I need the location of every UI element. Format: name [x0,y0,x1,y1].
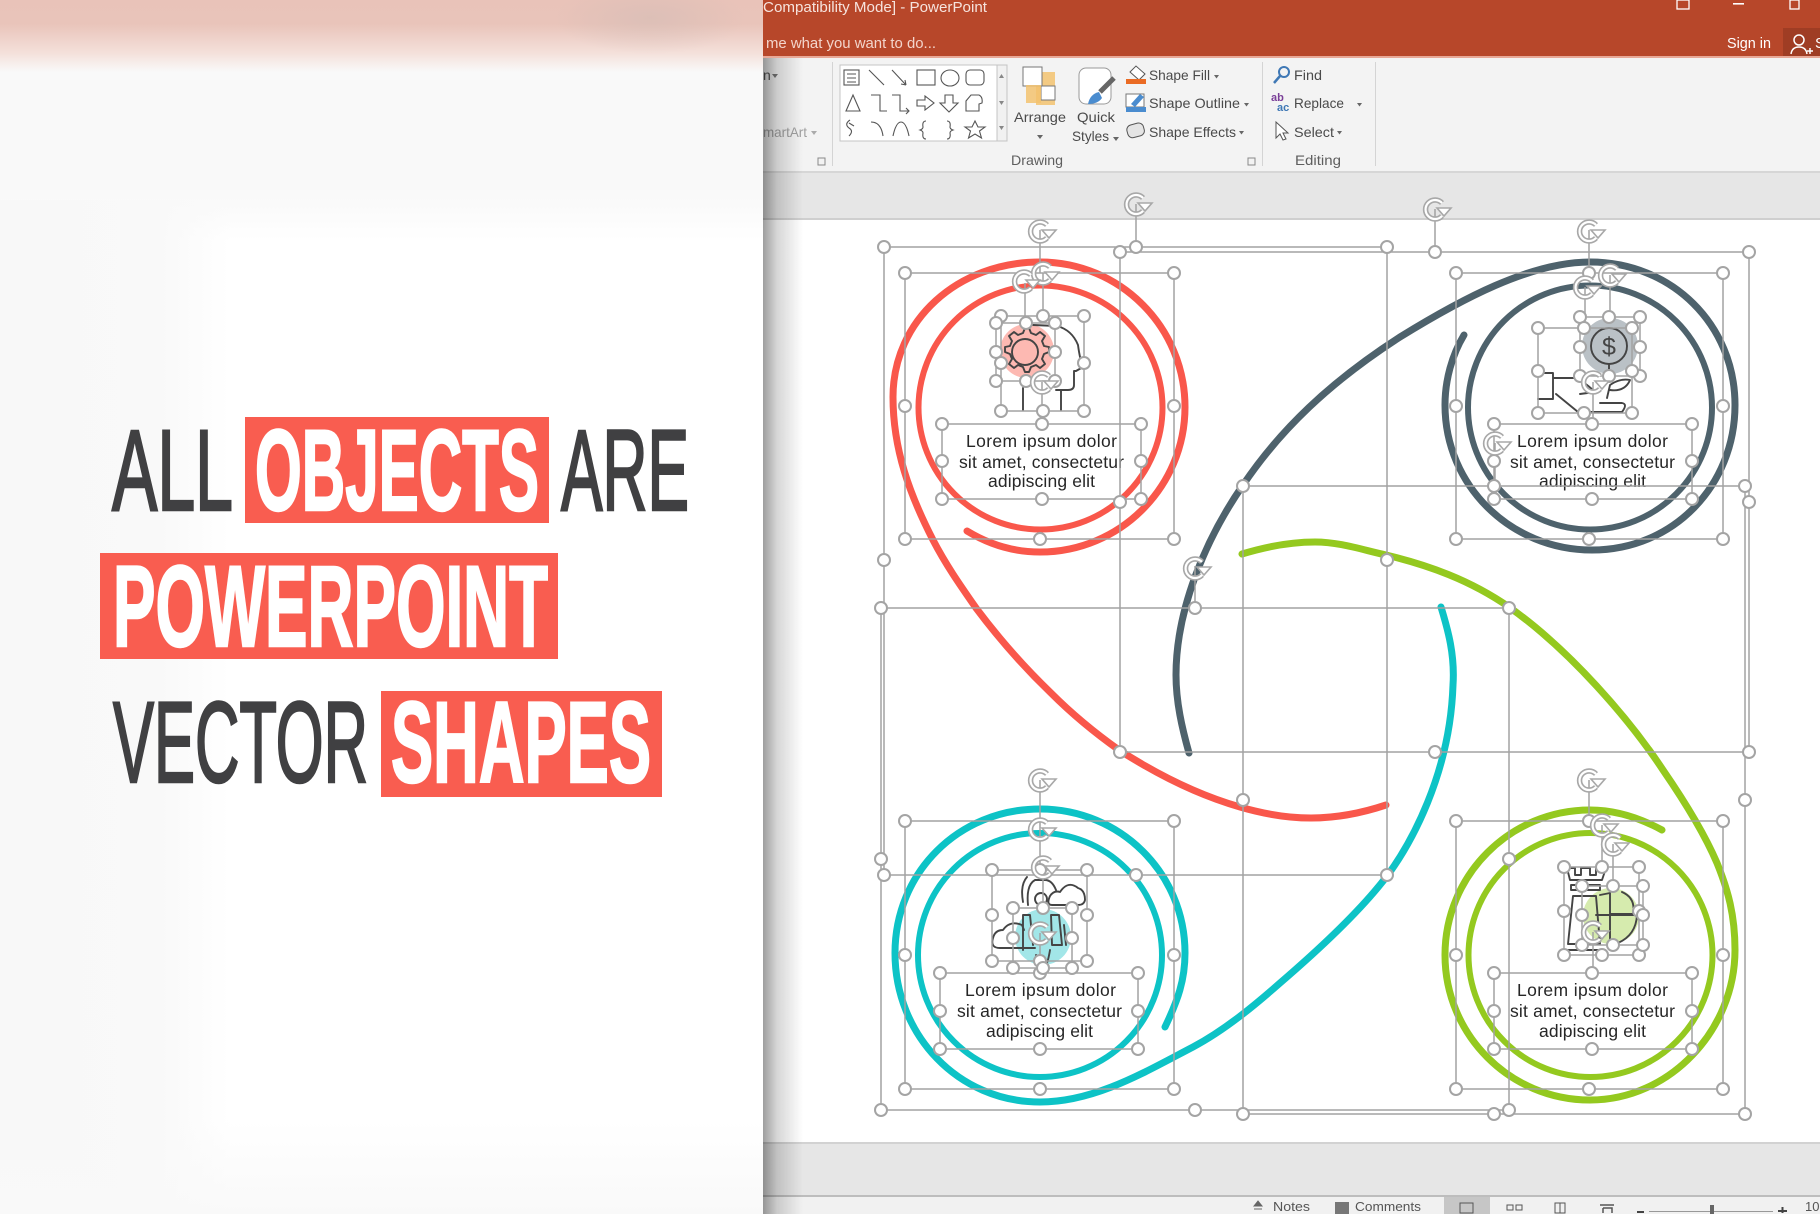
find, replace, select: ac [1277,102,1289,114]
shape gallery [840,65,1007,141]
text: teal item: sit amet, consectetur [957,1001,1122,1021]
title line 3: VECTOR [113,679,368,807]
text: red item: Lorem ipsum dolor [966,431,1117,451]
icon: head with gear [1000,324,1083,410]
title line 2: POWERPOINT [113,543,548,671]
title line 3: SHAPES [391,679,651,807]
shape fill, outline, effects: Shape Outline [1149,95,1240,111]
title line 1: ARE [561,407,689,535]
panel: powerpoint window title bar: Sign in [1727,35,1771,52]
panel: ribbon: martArt [763,124,807,140]
panel: powerpoint window title bar [763,0,1820,58]
text: green item: sit amet, consectetur [1510,1001,1675,1021]
spiral: teal [895,607,1453,1102]
quick styles button: Styles [1072,128,1109,144]
text: slate item: Lorem ipsum dolor [1517,431,1668,451]
spiral: red [893,262,1386,818]
panel: status bar: Comments [1355,1199,1422,1214]
spiral: slate [1176,262,1735,753]
text: teal item: adipiscing elit [986,1021,1093,1041]
text: green item: adipiscing elit [1539,1021,1646,1041]
text: red item: adipiscing elit [988,471,1095,491]
arrange button: Arrange [1014,109,1066,125]
find, replace, select: Select [1294,124,1334,140]
text: slate item: sit amet, consectetur [1510,452,1675,472]
find, replace, select: Replace [1294,95,1344,111]
icon: hand with coin and sprout [1538,318,1638,412]
title line 1 [112,407,689,535]
quick styles button: Quick [1077,109,1116,125]
ribbon group labels [818,152,1341,168]
shape fill, outline, effects: Shape Effects [1149,124,1236,140]
icon: castle tower and pie chart [1565,868,1639,950]
arrange button [1014,67,1066,139]
selection bounding boxes [881,204,1749,1114]
title line 1: ALL [112,407,233,535]
text: slate item: adipiscing elit [1539,471,1646,491]
title line 2 [100,543,558,671]
spiral: green [1242,542,1735,1100]
text: green item: Lorem ipsum dolor [1517,980,1668,1000]
panel: status bar: Notes [1273,1199,1311,1214]
panel: ribbon [763,58,1820,173]
title: all objects are powerpoint vector shapes [100,407,689,807]
text: slate item [1510,431,1675,491]
panel: blurred left background [0,0,764,1214]
panel edge shadow [763,58,803,1214]
text: teal item [957,980,1122,1041]
panel: status bar: 10 [1805,1199,1819,1214]
quick styles button [1072,68,1119,144]
text: green item [1510,980,1675,1041]
find, replace, select: Find [1294,67,1322,83]
find, replace, select: ab [1271,92,1284,104]
text: teal item: Lorem ipsum dolor [965,980,1116,1000]
rotation handles [1015,195,1629,943]
panel: workspace gray bands [763,173,1820,1197]
shape fill, outline, effects: Shape Fill [1149,67,1210,83]
text: red item [959,431,1124,491]
ribbon group labels: Editing [1295,152,1341,168]
icon: hand with coin and sprout: $ [1602,333,1616,361]
panel: powerpoint window title bar: me what you want to do... [766,35,936,52]
title line 1: OBJECTS [255,407,539,535]
panel: status bar [763,1197,1820,1214]
find, replace, select [1271,67,1362,140]
selection handles [875,241,1755,1120]
panel: ribbon: n [763,67,771,83]
text: red item: sit amet, consectetur [959,452,1124,472]
icon: factory and clouds [992,877,1085,965]
shape fill, outline, effects [1126,66,1249,140]
ribbon group labels: Drawing [1011,152,1063,168]
